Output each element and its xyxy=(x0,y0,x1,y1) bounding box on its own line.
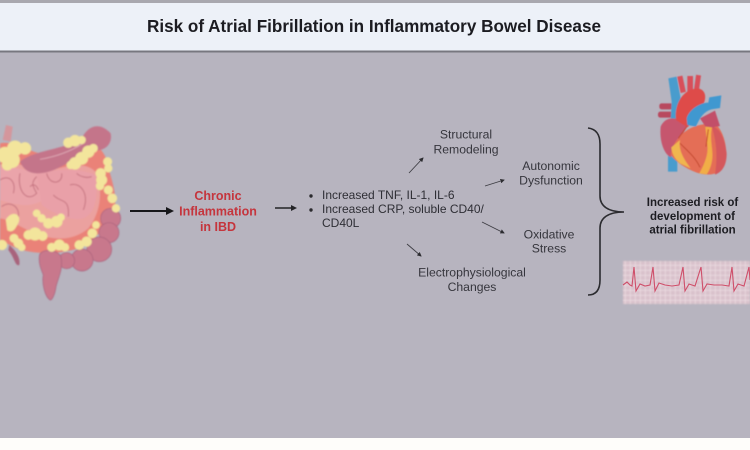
label: chronic inflammation: Chronic xyxy=(194,189,242,203)
label: oxidative stress xyxy=(524,228,575,256)
arrow: intestines to inflammation xyxy=(130,207,174,215)
label: oxidative stress: Stress xyxy=(532,242,566,256)
arrow: to electrophysiological changes xyxy=(407,244,421,256)
bullet list: inflammatory markers xyxy=(309,188,485,230)
label: structural remodeling xyxy=(433,128,499,156)
text: increased risk of atrial fibrillation xyxy=(647,197,738,236)
text: increased risk of atrial fibrillation: Increased risk of xyxy=(647,197,738,209)
icon: heart xyxy=(658,75,727,175)
title: Risk of Atrial Fibrillation in Inflammatory Bowel Disease xyxy=(147,16,601,36)
bullet list: inflammatory markers: Increased CRP, soluble CD40/ xyxy=(322,202,485,216)
label: autonomic dysfunction: Dysfunction xyxy=(519,174,583,188)
label: electrophysiological changes xyxy=(418,266,526,294)
brace xyxy=(588,128,624,295)
text: increased risk of atrial fibrillation: atrial fibrillation xyxy=(649,224,736,236)
label: autonomic dysfunction: Autonomic xyxy=(522,159,580,173)
bullet list: inflammatory markers: CD40L xyxy=(322,216,360,230)
label: chronic inflammation xyxy=(179,189,257,234)
label: oxidative stress: Oxidative xyxy=(524,228,575,242)
label: electrophysiological changes: Electrophysiological xyxy=(418,266,526,280)
icon: intestines xyxy=(0,125,121,300)
label: chronic inflammation: in IBD xyxy=(200,220,236,234)
label: electrophysiological changes: Changes xyxy=(448,280,496,294)
label: structural remodeling: Structural xyxy=(440,128,492,142)
text: increased risk of atrial fibrillation: development of xyxy=(650,211,735,223)
arrow: to oxidative stress xyxy=(482,222,504,233)
arrow: inflammation to markers xyxy=(275,205,297,211)
header band xyxy=(0,0,750,52)
arrow: to autonomic dysfunction xyxy=(485,180,504,186)
label: chronic inflammation: Inflammation xyxy=(179,204,257,218)
label: structural remodeling: Remodeling xyxy=(433,142,499,156)
label: autonomic dysfunction xyxy=(519,159,583,188)
arrow: to structural remodeling xyxy=(409,158,423,173)
icon: ECG strip xyxy=(623,261,750,304)
bullet list: inflammatory markers: Increased TNF, IL-1, IL-6 xyxy=(322,188,455,202)
